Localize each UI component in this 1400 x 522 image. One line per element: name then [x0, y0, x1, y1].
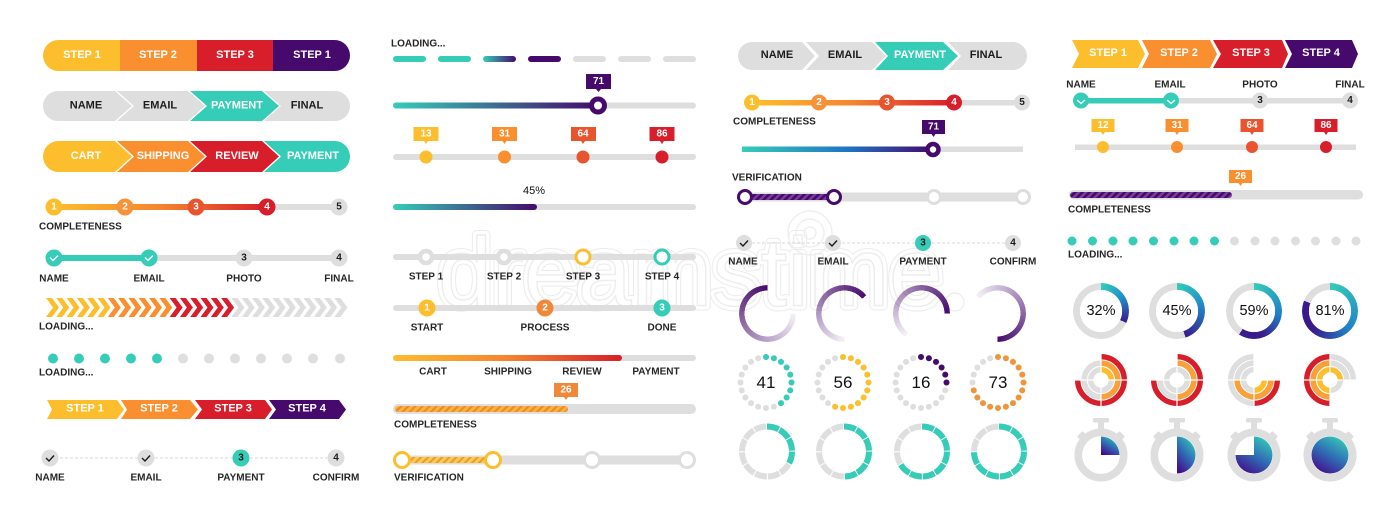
dot loading row [39, 354, 345, 378]
check stepper: PHOTO [226, 274, 262, 284]
progress 45%: 45% [523, 185, 545, 197]
chevron bar: name email payment final: NAME [70, 100, 102, 112]
chevron bar: name email payment final [43, 91, 350, 121]
dashed stepper: CONFIRM [313, 472, 359, 484]
dotted ring 16 [896, 357, 947, 408]
arrow steps: STEP 1 [66, 402, 104, 414]
numbered stepper: completeness: 5 [1019, 97, 1025, 108]
chevron bar: cart shipping review payment: PAYMENT [287, 150, 339, 162]
dotted ring 56: 56 [834, 373, 852, 392]
multi marker slider: 86 [1320, 120, 1332, 131]
multi marker slider [393, 127, 696, 164]
dashed stepper [728, 235, 1036, 268]
stopwatch 25% [1077, 418, 1125, 478]
dotted ring 56 [818, 357, 869, 408]
panel: column 4 [1066, 40, 1365, 478]
slider with value 71 [393, 74, 696, 112]
numbered stepper: completeness: 5 [336, 202, 342, 212]
verification stepper [732, 172, 1030, 204]
numbered stepper: completeness: 3 [193, 202, 199, 212]
chevron bar: name email payment final: NAME [761, 49, 793, 61]
numbered stepper: completeness [733, 94, 1030, 128]
dashed stepper: EMAIL [130, 472, 162, 484]
start process done stepper [393, 300, 696, 334]
chevron bar: name email payment final: FINAL [291, 100, 323, 112]
percentage rings [1073, 283, 1358, 339]
cart progress bar: CART [419, 366, 447, 378]
slider with value 71: 71 [928, 122, 939, 132]
stopwatch 50% [1153, 418, 1201, 478]
progress 45% [393, 185, 696, 210]
chevron bar: name email payment final [738, 42, 1027, 70]
concentric chart 2 [1149, 352, 1205, 408]
multi marker slider: 31 [1171, 120, 1183, 131]
segmented bar: steps: STEP 3 [216, 49, 254, 61]
chevron bar: name email payment final: PAYMENT [894, 49, 946, 61]
check stepper: FINAL [1335, 80, 1365, 90]
segmented bar: steps: STEP 1 [293, 49, 331, 61]
hatched progress 26 [1068, 170, 1363, 216]
chevron bar: cart shipping review payment: CART [71, 150, 102, 162]
dashed loading bar [391, 38, 696, 62]
start process done stepper: 1 [424, 302, 430, 314]
hatched progress 26: 26 [1235, 171, 1246, 182]
start process done stepper: START [411, 322, 443, 334]
chevron bar: name email payment final: EMAIL [828, 49, 862, 61]
panel: column 3 [728, 42, 1036, 476]
dotted ring 73: 73 [989, 373, 1007, 392]
stopwatch 100% [1306, 418, 1354, 478]
multi marker slider: 64 [577, 128, 589, 140]
chevron bar: name email payment final: FINAL [970, 49, 1002, 61]
multi marker slider: 12 [1097, 120, 1109, 131]
numbered stepper: completeness: 3 [884, 97, 890, 108]
chevron bar: cart shipping review payment [43, 141, 350, 172]
arrow steps [1072, 40, 1358, 68]
concentric quadrant charts [1073, 352, 1358, 408]
ring stepper: STEP 4 [645, 272, 680, 282]
dot loading row: LOADING... [1068, 250, 1123, 260]
ring stepper: STEP 2 [487, 272, 522, 282]
dotted ring 73 [972, 357, 1024, 408]
panel: column 2 [391, 38, 696, 484]
start process done stepper: 2 [542, 302, 548, 314]
chevron loading bar: LOADING... [39, 322, 94, 332]
dashed stepper: EMAIL [817, 256, 849, 268]
chevron bar: cart shipping review payment: SHIPPING [137, 150, 189, 162]
arrow steps: STEP 4 [1302, 47, 1341, 59]
arrow steps: STEP 3 [214, 402, 252, 414]
check stepper: NAME [1066, 80, 1096, 90]
numbered stepper: completeness: COMPLETENESS [39, 222, 122, 232]
dashed stepper: PAYMENT [899, 256, 947, 268]
numbered stepper: completeness: 1 [749, 97, 755, 108]
stopwatch 75% [1230, 418, 1278, 478]
arrow steps: STEP 2 [140, 402, 178, 414]
ring stepper [393, 250, 696, 282]
arrow steps: STEP 2 [1160, 47, 1198, 59]
hatched progress 26: 26 [560, 384, 572, 396]
dashed stepper: NAME [728, 256, 758, 268]
dot loading row [1068, 236, 1360, 260]
chevron loading bar [39, 298, 347, 332]
slider with value 71: 71 [593, 76, 604, 87]
check stepper: 3 [1257, 95, 1263, 106]
chevron bar: name email payment final: PAYMENT [211, 100, 263, 112]
numbered stepper: completeness: COMPLETENESS [733, 116, 816, 128]
verification stepper [393, 452, 696, 484]
numbered stepper: completeness: 1 [51, 202, 57, 212]
check stepper: EMAIL [133, 274, 165, 284]
percentage rings: 32% [1086, 303, 1116, 319]
multi marker slider: 13 [420, 128, 432, 140]
numbered stepper: completeness [39, 198, 348, 232]
arrow steps: STEP 3 [1232, 47, 1270, 59]
hatched progress 26: COMPLETENESS [1068, 204, 1151, 216]
numbered stepper: completeness: 4 [264, 202, 270, 212]
check stepper: PHOTO [1242, 80, 1278, 90]
stopwatch progress icons [1077, 418, 1354, 478]
percentage rings: 81% [1315, 303, 1345, 319]
dashed stepper: NAME [35, 472, 65, 484]
numbered stepper: completeness: 2 [122, 202, 128, 212]
dashed loading bar: LOADING... [391, 38, 446, 50]
concentric chart 4 [1302, 352, 1358, 408]
watermark: dreamstime [438, 218, 943, 326]
segmented bar: steps: STEP 1 [63, 49, 101, 61]
dotted ring 41 [740, 357, 792, 408]
dashed stepper: CONFIRM [990, 256, 1036, 268]
multi marker slider [1075, 119, 1356, 153]
dashed stepper: 4 [1010, 238, 1016, 248]
check stepper: 4 [336, 252, 342, 264]
concentric chart 1 [1073, 352, 1129, 408]
ring stepper: STEP 3 [566, 272, 601, 282]
segmented bar: steps [43, 40, 350, 71]
start process done stepper: 3 [659, 302, 665, 314]
dashed stepper: 3 [238, 452, 244, 464]
percentage rings: 45% [1162, 303, 1192, 319]
check stepper: 3 [241, 252, 247, 264]
cart progress bar [393, 355, 696, 378]
segmented rings [742, 426, 1024, 476]
hatched progress 26 [393, 383, 696, 430]
verification stepper: VERIFICATION [394, 472, 464, 484]
cart progress bar: PAYMENT [632, 366, 680, 378]
percentage rings: 59% [1239, 303, 1269, 319]
multi marker slider: 31 [499, 128, 510, 140]
chevron bar: name email payment final: EMAIL [143, 100, 177, 112]
panel: column 1 [35, 40, 359, 484]
arrow steps: STEP 4 [288, 402, 327, 414]
dashed stepper: 3 [920, 238, 926, 248]
arrow steps [47, 400, 346, 419]
verification stepper: VERIFICATION [732, 172, 802, 184]
check stepper: NAME [39, 274, 69, 284]
check stepper [1066, 80, 1365, 108]
multi marker slider: 64 [1246, 120, 1258, 131]
watermark: dreamstime [438, 218, 943, 326]
dashed stepper: PAYMENT [217, 472, 265, 484]
ring stepper: STEP 1 [409, 272, 444, 282]
chevron bar: cart shipping review payment: REVIEW [215, 150, 259, 162]
dotted ring 16: 16 [912, 373, 930, 392]
start process done stepper: PROCESS [521, 322, 570, 334]
check stepper: FINAL [324, 274, 354, 284]
check stepper: EMAIL [1154, 80, 1186, 90]
start process done stepper: DONE [648, 322, 677, 334]
dashed stepper [35, 450, 359, 484]
dotted progress rings [740, 357, 1024, 408]
slider with value 71 [742, 120, 1023, 155]
arrow steps: STEP 1 [1089, 47, 1127, 59]
dotted ring 41: 41 [757, 373, 775, 392]
check stepper [39, 250, 354, 284]
hatched progress 26: COMPLETENESS [394, 420, 477, 430]
numbered stepper: completeness: 2 [816, 97, 822, 108]
multi marker slider: 86 [656, 128, 668, 140]
check stepper: 4 [1347, 95, 1353, 106]
segmented bar: steps: STEP 2 [139, 49, 177, 61]
dot loading row: LOADING... [39, 368, 94, 378]
cart progress bar: REVIEW [562, 366, 602, 378]
fading spinner rings [738, 285, 1026, 342]
dashed stepper: 4 [333, 452, 339, 464]
concentric chart 3 [1226, 352, 1282, 408]
watermark: dreamstime [438, 218, 943, 326]
cart progress bar: SHIPPING [484, 366, 532, 378]
numbered stepper: completeness: 4 [951, 97, 957, 108]
